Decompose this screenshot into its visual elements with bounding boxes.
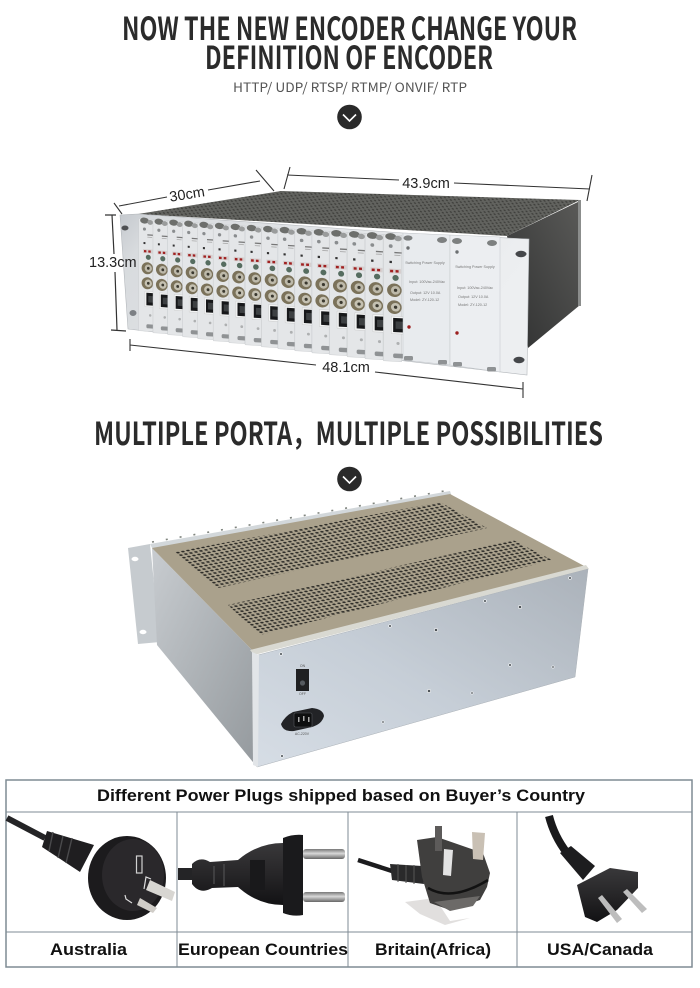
power supply module 1: Model: ZY-120-12 [410, 298, 439, 302]
icon: chevron down badge [337, 105, 362, 129]
power supply module 2 [450, 235, 500, 372]
rear panel [257, 569, 588, 767]
label: Australia: Australia [50, 940, 128, 959]
power inlet: AC-220V [295, 732, 310, 736]
dimension: 43.9cm [284, 167, 592, 201]
power supply module 2: Switching Power Supply [455, 265, 495, 269]
plug: Australia [7, 818, 175, 920]
panel: power plugs table [6, 780, 692, 967]
title [122, 4, 577, 79]
label: USA/Canada: USA/Canada [547, 940, 654, 959]
plug: Britain [358, 826, 490, 925]
power supply module 2: Output: 12V 10.0A [458, 295, 489, 299]
power supply module 1: Input: 100Vac-240Vac [409, 280, 445, 284]
dimension: 30cm: 30cm [168, 184, 206, 206]
dimension: 48.1cm [130, 339, 523, 398]
subtitle: protocols: HTTP/ UDP/ RTSP/ RTMP/ ONVIF/ RTP [233, 77, 467, 96]
power supply module 2: Model: ZY-120-12 [458, 303, 487, 307]
left side panel [152, 548, 257, 767]
rear screws [280, 577, 571, 757]
16 encoder modules [139, 217, 407, 362]
rocker switch [296, 664, 309, 696]
dimension: 13.3cm [89, 215, 137, 331]
power supply module 2: Input: 100Vac-240Vac [457, 286, 493, 290]
top edge trim [250, 565, 589, 655]
table grid [6, 780, 692, 967]
product photo: encoder chassis rear [128, 490, 589, 767]
title: DEFINITION OF ENCODER [205, 33, 493, 79]
chassis top mesh [138, 191, 580, 236]
dimension: 43.9cm: 43.9cm [402, 176, 450, 192]
plug: European [178, 835, 345, 916]
power supply module 1 [403, 233, 450, 365]
power inlet [281, 708, 324, 736]
product photo: encoder chassis front with dimensions [89, 167, 592, 398]
dimension: 13.3cm: 13.3cm [89, 255, 137, 271]
top cover [152, 494, 588, 650]
dimension: 30cm [114, 170, 274, 214]
power supply module 1: Switching Power Supply [405, 261, 445, 265]
rocker switch: OFF [299, 692, 306, 696]
left strip [252, 652, 259, 767]
ear screw holes [122, 226, 526, 363]
ventilation holes upper [175, 502, 487, 588]
front panel [120, 214, 529, 375]
back rail with connectors [150, 490, 452, 552]
icon: chevron down badge 2 [337, 467, 362, 491]
ventilation holes lower [228, 540, 552, 635]
rocker switch: ON [300, 664, 306, 668]
dimension: 48.1cm: 48.1cm [322, 360, 370, 376]
table heading: Different Power Plugs shipped based on Buyer’s Country [97, 786, 586, 805]
label: European Countries: European Countries [178, 940, 348, 959]
power supply module 1: Output: 12V 10.0A [410, 291, 441, 295]
plug: USA [549, 816, 647, 923]
chassis right side [507, 200, 581, 348]
label: Britain (Africa): Britain(Africa) [375, 940, 491, 959]
mounting ear [128, 544, 160, 644]
